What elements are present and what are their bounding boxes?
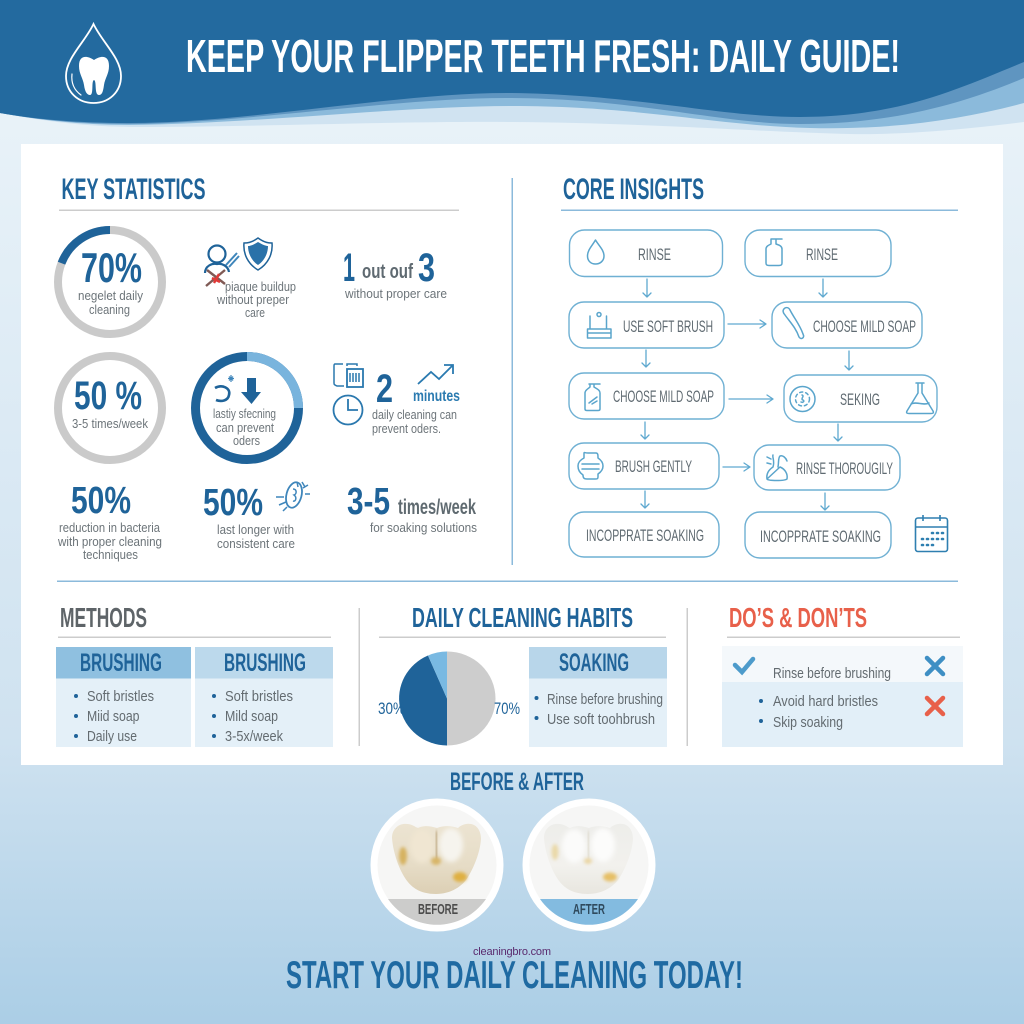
stat: 70% ring: negelet daily xyxy=(78,288,143,303)
stat: 50% last longer: consistent care xyxy=(217,536,295,551)
stat: plaque buildup xyxy=(205,238,296,320)
flow step: use soft brush: USE SOFT BRUSH xyxy=(623,317,713,336)
arrow xyxy=(728,320,766,328)
pie chart: 70% xyxy=(494,699,520,718)
call to action: START YOUR DAILY CLEANING TODAY! xyxy=(286,954,743,997)
stat: 1 out of 3: 1 xyxy=(343,246,355,290)
card: brushing weekly: Soft bristles xyxy=(225,688,293,705)
header banner xyxy=(0,0,1024,134)
panel: key statistics xyxy=(57,173,477,562)
flow step: incorporate soaking left xyxy=(569,512,719,557)
stat: odor prevention ring: lastiy sfecning xyxy=(213,406,276,421)
stat: 50% bacteria reduction: with proper cleaning xyxy=(57,534,162,549)
arrow xyxy=(643,279,651,297)
icon: check xyxy=(735,659,753,672)
icon: microbe xyxy=(276,481,310,511)
card: soaking: Rinse before brushing xyxy=(547,691,663,708)
stat: plaque buildup: without preper xyxy=(216,292,290,307)
panel: do's and don'ts: Skip soaking xyxy=(773,714,843,731)
stat: 50% ring xyxy=(58,356,162,460)
flow step: rinse thoroughly: RINSE THOROUGILY xyxy=(796,459,893,478)
flow step: use soft brush xyxy=(569,302,724,348)
flow step: brush gently: BRUSH GENTLY xyxy=(615,457,692,476)
stat: 70% ring: cleaning xyxy=(89,302,130,317)
icon: sparkle and down arrow xyxy=(215,375,261,404)
main white panel xyxy=(21,144,1003,765)
card: brushing weekly: 3-5x/week xyxy=(225,728,283,745)
stat: 3-5 times per week: 3-5 xyxy=(347,481,390,523)
stat: plaque buildup: piaque buildup xyxy=(225,279,296,294)
stat: plaque buildup: care xyxy=(245,305,265,320)
heading: before and after: BEFORE & AFTER xyxy=(450,768,584,796)
heading: methods: METHODS xyxy=(60,602,147,633)
stat: 3-5 times per week xyxy=(347,481,477,535)
card: brushing weekly: Mild soap xyxy=(225,708,278,725)
arrow xyxy=(834,424,842,441)
panel: do's and don'ts: Avoid hard bristles xyxy=(773,693,878,710)
divider xyxy=(512,178,513,565)
divider xyxy=(686,608,688,746)
stat: 2 minutes: minutes xyxy=(413,388,460,405)
panel: do's and don'ts xyxy=(722,602,963,747)
flow step: choose mild soap with brush icon xyxy=(772,302,922,348)
flow step: incorporate soaking right: INCOPPRATE SOAKING xyxy=(760,527,881,546)
card: soaking: Use soft toohbrush xyxy=(547,711,655,728)
arrow xyxy=(819,279,827,297)
flow step: rinse: RINSE xyxy=(638,245,671,264)
pie chart xyxy=(378,652,520,746)
stat: 1 out of 3: without proper care xyxy=(344,286,447,301)
flow step: incorporate soaking left: INCOPPRATE SOAKING xyxy=(586,526,704,545)
stat: 50% bacteria reduction: 50% xyxy=(71,480,131,522)
arrow xyxy=(729,395,773,403)
panel: do's and don'ts: Rinse before brushing xyxy=(773,665,891,682)
stat: 50% last longer: 50% xyxy=(203,482,263,524)
flow step: soaking xyxy=(784,375,937,422)
stat: odor prevention ring xyxy=(196,356,298,460)
divider xyxy=(57,580,958,582)
flow step: choose mild soap: CHOOSE MILD SOAP xyxy=(613,387,714,406)
flow step: choose mild soap with brush icon: CHOOSE MILD SOAP xyxy=(813,317,916,336)
card: brushing weekly: BRUSHING xyxy=(224,649,306,677)
icon: blue cross xyxy=(927,658,943,674)
flow step: incorporate soaking right xyxy=(745,512,891,558)
flow step: soaking: SEKING xyxy=(840,390,880,409)
divider xyxy=(358,608,360,746)
panel: before photo xyxy=(370,798,504,932)
icon: water drop with tooth xyxy=(66,24,121,103)
stat: 50% bacteria reduction: reduction in bacteria xyxy=(59,520,161,535)
stat: odor prevention ring: can prevent xyxy=(216,420,274,435)
stat: 1 out of 3 xyxy=(343,246,447,301)
icon: person and shield xyxy=(205,238,272,286)
pie chart: 30% xyxy=(378,699,405,718)
heading: core insights: CORE INSIGHTS xyxy=(563,173,704,206)
flow step: choose mild soap xyxy=(569,373,724,419)
arrow xyxy=(641,422,649,439)
panel: after photo xyxy=(522,798,656,932)
stat: 50% last longer xyxy=(203,481,310,551)
stat: 2 minutes: 2 xyxy=(376,367,393,411)
panel: after photo: AFTER xyxy=(573,902,605,918)
heading: key statistics: KEY STATISTICS xyxy=(62,173,206,206)
icon: red cross xyxy=(927,698,943,714)
stat: 3-5 times per week: times/week xyxy=(398,496,476,519)
icon: trend arrow xyxy=(418,365,453,384)
flow step: rinse with pump xyxy=(745,230,891,276)
stat: odor prevention ring: oders xyxy=(233,433,260,448)
stat: 2 minutes: prevent oders. xyxy=(372,421,441,436)
stat: 70% ring xyxy=(58,230,162,334)
card: soaking: SOAKING xyxy=(559,649,629,677)
heading: daily cleaning habits: DAILY CLEANING HABITS xyxy=(412,602,633,633)
arrow xyxy=(641,491,649,508)
arrow xyxy=(845,351,853,370)
stat: 50% ring: 3-5 times/week xyxy=(72,416,148,431)
heading: do's and don'ts: DO’S & DON’TS xyxy=(729,602,867,633)
card: soaking xyxy=(529,647,667,747)
stat: 50% ring: 50 % xyxy=(74,374,142,418)
flow step: rinse xyxy=(570,230,722,276)
flow step: rinse thoroughly xyxy=(754,445,900,490)
stat: 1 out of 3: out ouf xyxy=(362,261,413,283)
illustration: stained tooth xyxy=(392,824,481,894)
panel: methods xyxy=(56,602,333,747)
illustration: clean tooth xyxy=(544,824,633,894)
stat: 1 out of 3: 3 xyxy=(418,246,435,290)
stat: 50% bacteria reduction: techniques xyxy=(83,547,138,562)
stat: 2 minutes xyxy=(334,364,460,436)
card: brushing daily: BRUSHING xyxy=(80,649,162,677)
arrow xyxy=(723,463,750,471)
icon: calendar xyxy=(916,515,948,552)
stat: 70% ring: 70% xyxy=(81,244,142,291)
stat: 3-5 times per week: for soaking solutions xyxy=(370,520,477,535)
panel: core insights xyxy=(561,173,958,558)
source url: cleaningbro.com xyxy=(473,946,551,958)
card: brushing daily: Miid soap xyxy=(87,708,140,725)
card: brushing daily xyxy=(56,647,191,747)
stat: 50% last longer: last longer with xyxy=(217,522,294,537)
flow step: brush gently xyxy=(569,443,719,489)
panel: daily cleaning habits xyxy=(378,602,667,747)
card: brushing daily: Daily use xyxy=(87,728,137,745)
arrow xyxy=(821,493,829,510)
card: brushing weekly xyxy=(195,647,333,747)
stat: 50% bacteria reduction xyxy=(57,480,162,562)
icon: calendar and clock xyxy=(334,364,363,424)
flow step: rinse with pump: RINSE xyxy=(806,245,838,264)
stat: 2 minutes: daily cleaning can xyxy=(372,407,457,422)
arrow xyxy=(642,350,650,367)
panel: before photo: BEFORE xyxy=(418,902,458,918)
card: brushing daily: Soft bristles xyxy=(87,688,154,705)
